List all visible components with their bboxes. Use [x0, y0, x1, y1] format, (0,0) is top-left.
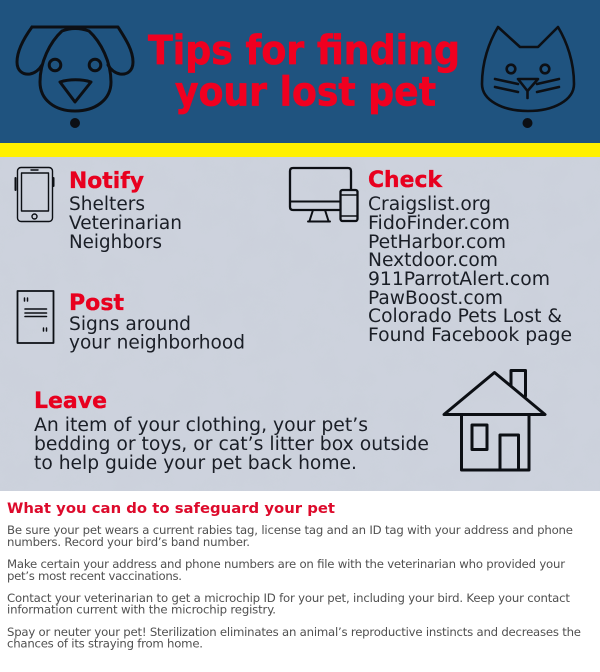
icon: dog [17, 27, 133, 128]
list: notify: Neighbors [69, 232, 162, 253]
text: leave: to help guide your pet back home. [34, 453, 357, 474]
list: check: Craigslist.org [368, 194, 491, 215]
title: Tips for finding [148, 28, 460, 74]
heading: safeguard: What you can do to safeguard your pet [7, 501, 335, 517]
panel: notify [16, 168, 182, 253]
icon: sign [18, 291, 54, 343]
text: post [69, 314, 245, 354]
tip: tags [7, 523, 573, 549]
yellow stripe [0, 143, 600, 157]
list: check: Colorado Pets Lost & [368, 306, 562, 327]
text: post: Signs around [69, 314, 191, 335]
list: check: Found Facebook page [368, 325, 572, 346]
tip: spay or neuter: chances of its straying from home. [7, 636, 203, 650]
tip: spay or neuter [7, 625, 581, 650]
tip: tags: Be sure your pet wears a current rabies tag, license tag and an ID tag with your address and phone [7, 523, 573, 537]
tip: tags: numbers. Record your bird’s band number. [7, 535, 250, 549]
panel: check [290, 167, 572, 346]
tip: spay or neuter: Spay or neuter your pet! Sterilization eliminates an animal’s reproductive instincts and decreases the [7, 625, 581, 639]
heading: leave: Leave [34, 388, 107, 414]
list: check: 911ParrotAlert.com [368, 269, 550, 290]
header banner [0, 0, 600, 143]
icon: house [444, 370, 545, 470]
list: notify: Shelters [69, 194, 145, 215]
text: post: your neighborhood [69, 332, 245, 354]
heading: notify: Notify [69, 168, 144, 194]
tip: address [7, 557, 565, 583]
list: check: PetHarbor.com [368, 232, 506, 253]
icon: smartphone [16, 168, 54, 222]
tip: microchip: information current with the microchip registry. [7, 602, 276, 616]
panel: post [18, 290, 245, 354]
panel: leave [34, 370, 545, 474]
list: check: PawBoost.com [368, 288, 503, 309]
tip: address: Make certain your address and phone numbers are on file with the veterinarian who provided your [7, 557, 565, 571]
heading: check: Check [368, 167, 443, 193]
title [148, 28, 460, 116]
panel: safeguard tips [0, 491, 600, 672]
list: check: Nextdoor.com [368, 250, 498, 271]
title: your lost pet [175, 70, 436, 116]
text: leave: An item of your clothing, your pet’s [34, 415, 368, 436]
tip: microchip [7, 591, 570, 616]
list: check [368, 194, 572, 346]
icon: cat [482, 27, 574, 128]
list: check: FidoFinder.com [368, 213, 510, 234]
text: leave [34, 415, 429, 474]
textured panel [0, 157, 600, 491]
heading: post: Post [69, 290, 124, 316]
text: leave: bedding or toys, or cat’s litter box outside [34, 434, 429, 455]
list: notify [69, 194, 182, 253]
icon: devices [290, 168, 358, 222]
tip: microchip: Contact your veterinarian to get a microchip ID for your pet, including your bird. Keep your contact [7, 591, 570, 605]
tip: address: pet’s most recent vaccinations. [7, 569, 182, 583]
list: notify: Veterinarian [69, 213, 182, 234]
